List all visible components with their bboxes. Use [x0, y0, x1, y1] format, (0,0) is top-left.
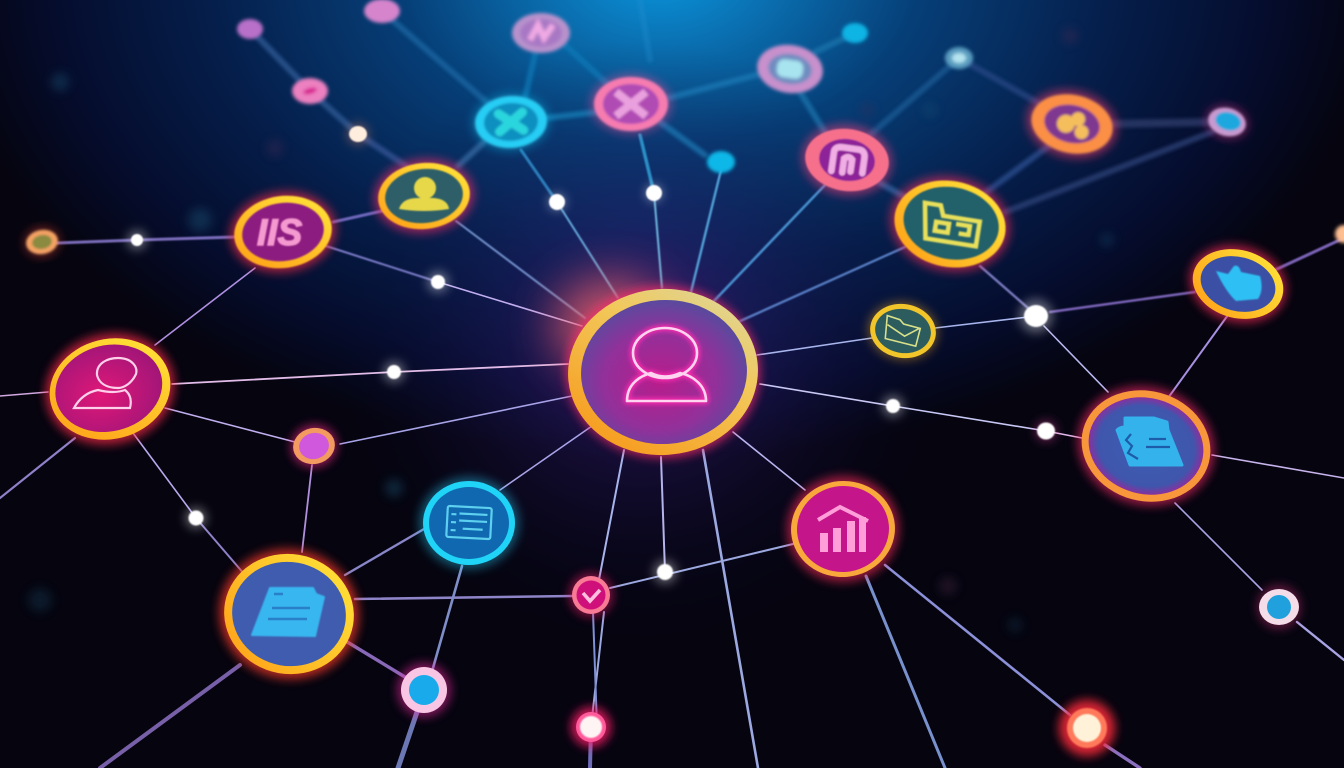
node: orange edge	[1335, 225, 1344, 243]
icon: check	[583, 590, 600, 601]
icon: cross	[498, 112, 524, 132]
node: pink cross	[591, 75, 671, 133]
node: lavender with light center	[754, 41, 826, 97]
icon: user solid	[399, 177, 449, 211]
node: cyan cross	[471, 91, 551, 153]
icon: envelope	[885, 316, 921, 346]
node: cyan small	[707, 151, 735, 173]
connectors: mid links	[57, 135, 1344, 322]
icon: blue file	[252, 588, 324, 636]
small white junction dots	[127, 123, 1057, 584]
node: blue folder	[1064, 371, 1228, 521]
icon: bar chart	[818, 507, 868, 552]
node: glowing red dot right	[1059, 700, 1115, 756]
small far nodes	[237, 0, 1344, 243]
node: gold folder	[882, 166, 1018, 282]
icon: user outline	[74, 358, 136, 408]
connectors: near, thin links	[0, 268, 1344, 768]
icon: folder outline	[920, 203, 981, 246]
node: far right blue small	[1203, 101, 1251, 143]
icon: user outline	[627, 328, 706, 401]
icon: blue folder	[1117, 418, 1182, 465]
node: check mark	[569, 573, 613, 617]
node: large blue file	[209, 538, 369, 690]
node: right blue dot	[1257, 585, 1301, 629]
node: cyan top	[842, 23, 868, 43]
node: yellow user	[370, 154, 478, 238]
node: blue dot lower	[397, 663, 451, 717]
icon: pink cross	[616, 92, 646, 116]
node: pink far	[364, 0, 400, 23]
icon: IIS glyph: IIS	[257, 212, 303, 253]
node: violet small	[287, 421, 341, 471]
icon: document	[446, 506, 492, 539]
node: left user	[34, 320, 186, 458]
node: cyan document	[419, 477, 519, 569]
node: IIS badge	[225, 185, 341, 279]
background bokeh dots	[28, 28, 1113, 632]
node: purple far	[237, 19, 263, 39]
icon: rounded glyph	[831, 146, 866, 175]
node: lavender far top	[512, 13, 570, 53]
icon: orange cluster	[1055, 108, 1092, 140]
node: thumbs up	[1181, 235, 1295, 333]
node: olive far left	[22, 224, 62, 260]
icon: faded N	[530, 25, 553, 40]
node: envelope folder	[864, 297, 942, 365]
icon: thumbs up	[1216, 266, 1262, 301]
node: bar chart	[783, 471, 903, 587]
node: glowing red dot bottom	[571, 707, 611, 747]
central node: user profile	[555, 280, 764, 461]
icon: light square	[776, 58, 804, 80]
node: pale blue top	[945, 47, 973, 69]
node: orange cluster	[1021, 82, 1123, 166]
connectors: far, blurred links	[250, 0, 1212, 212]
node: pink glyph	[798, 119, 896, 201]
node: pink oval	[292, 78, 328, 104]
